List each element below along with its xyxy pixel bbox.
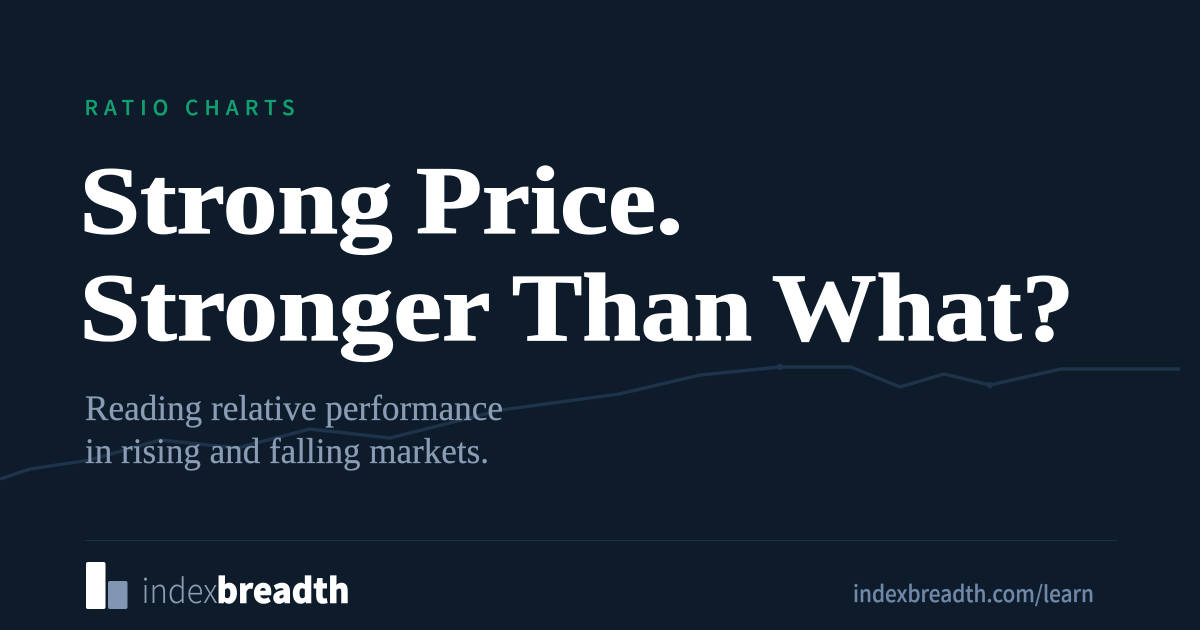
logo wordmark: index [142,564,218,613]
title line 1: Strong [80,147,392,254]
logo wordmark [142,564,350,613]
subtitle line 1: Reading relative performance [85,388,503,428]
title line 1: Price. [416,147,683,254]
logo wordmark: breadth [216,564,350,613]
logo [86,562,350,613]
logo icon: bars [86,562,128,609]
background line chart [0,366,1180,479]
title line 2: Stronger [80,254,491,361]
title line 1 [80,147,683,254]
subtitle line 2: in rising and falling markets. [85,431,489,471]
title line 2: Than [512,254,752,361]
title [80,147,1074,361]
title line 2: What? [772,254,1074,361]
title line 2 [80,254,1074,361]
subtitle [85,388,503,471]
site url: indexbreadth.com/learn [853,577,1094,609]
eyebrow label: RATIO CHARTS [84,91,294,121]
